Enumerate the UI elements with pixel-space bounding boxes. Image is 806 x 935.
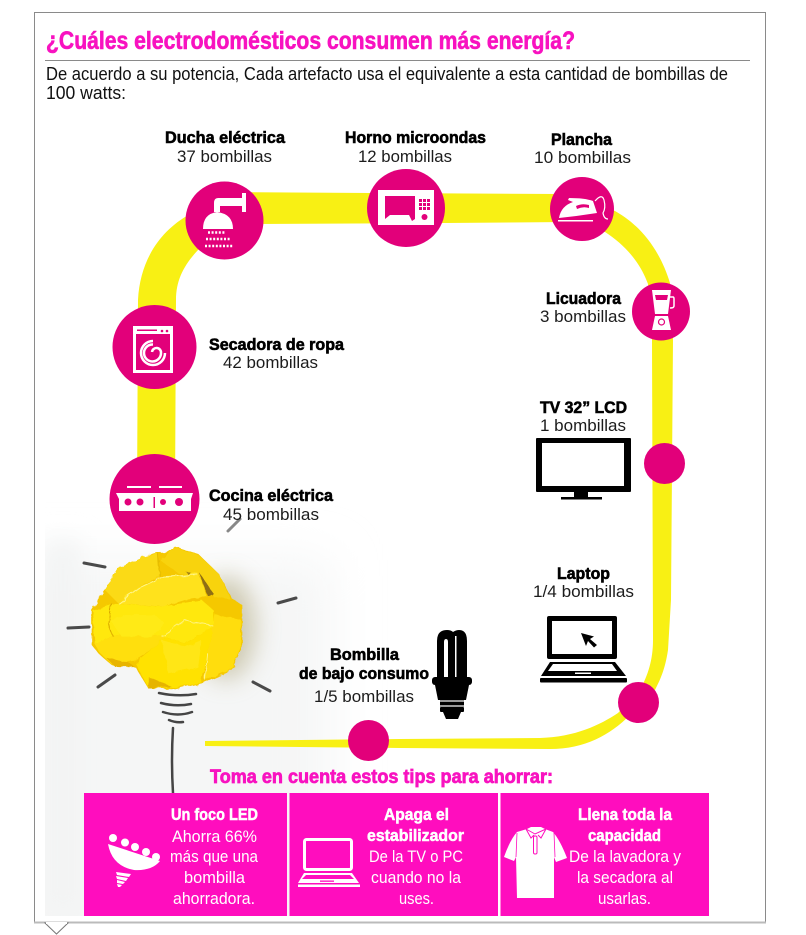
label: de bajo consumo (299, 664, 429, 683)
text: Un foco LED (171, 805, 258, 824)
text: De la lavadora y (569, 847, 681, 866)
paper shadow (196, 576, 256, 680)
label (540, 289, 626, 326)
icon: microwave (378, 190, 434, 225)
tips heading: Toma en cuenta estos tips para ahorrar: (210, 767, 553, 788)
station: horno microondas (345, 128, 486, 247)
label: 12 bombillas (358, 147, 452, 166)
label: 1/4 bombillas (533, 582, 634, 601)
label (209, 335, 345, 372)
icon: stove (116, 486, 193, 511)
label: 3 bombillas (540, 307, 626, 326)
intro text (46, 64, 728, 103)
label (209, 486, 334, 524)
circle (632, 282, 690, 340)
text: bombilla (184, 868, 246, 887)
dot: bottom route (348, 720, 389, 761)
label: Secadora de ropa (209, 335, 345, 354)
text: De la TV o PC (369, 847, 463, 866)
label: Bombilla (330, 645, 400, 664)
label: 45 bombillas (223, 505, 319, 524)
intro text: De acuerdo a su potencia, Cada artefacto usa el equivalente a esta cantidad de bombillas de (46, 64, 728, 84)
circle (112, 305, 196, 389)
text: Ahorra 66% (172, 827, 257, 846)
text: usarlas. (598, 889, 651, 908)
icon: shower (203, 193, 246, 246)
station: tv (536, 398, 685, 500)
text: capacidad (588, 826, 661, 845)
photo background (45, 544, 308, 916)
label (165, 128, 286, 166)
label: Horno microondas (345, 128, 486, 147)
crumpled paper bulb (68, 519, 296, 793)
dot (618, 682, 659, 723)
label: Licuadora (546, 289, 621, 308)
panel background (84, 793, 287, 916)
circle (550, 177, 614, 241)
text: Llena toda la (578, 805, 672, 824)
text: ahorradora. (173, 889, 255, 908)
icon: washer (133, 326, 173, 373)
label: Cocina eléctrica (209, 486, 334, 505)
label (534, 130, 631, 167)
station: licuadora (540, 282, 690, 340)
text: estabilizador (367, 826, 464, 845)
text: cuando no la (371, 868, 461, 887)
tip panel: capacidad (500, 793, 709, 916)
label: 1/5 bombillas (314, 687, 414, 706)
pencil rays (68, 519, 296, 691)
label: Plancha (551, 130, 613, 149)
label: 1 bombillas (540, 416, 626, 435)
text: la secadora al (577, 868, 673, 887)
label: Laptop (557, 564, 610, 583)
dot (644, 443, 685, 484)
label (540, 398, 627, 435)
icon: shirt (504, 827, 567, 898)
icon: cfl bulb (432, 630, 472, 719)
label: 42 bombillas (223, 353, 318, 372)
station: secadora de ropa (112, 305, 345, 389)
label (533, 564, 634, 601)
text (170, 805, 258, 908)
station: cocina eléctrica (110, 454, 334, 544)
text: uses. (399, 889, 434, 908)
paper ball (92, 547, 242, 689)
tip panel: foco LED (84, 793, 287, 916)
label: TV 32” LCD (540, 398, 627, 417)
station: ducha eléctrica (165, 128, 286, 260)
text: más que una (170, 847, 258, 866)
circle (110, 454, 200, 544)
text: Apaga el (384, 805, 449, 824)
text (367, 805, 464, 908)
icon: iron (558, 197, 608, 222)
label (345, 128, 486, 166)
icon: laptop (540, 616, 627, 682)
intro text: 100 watts: (46, 83, 126, 103)
label: 37 bombillas (177, 147, 272, 166)
station: bombilla de bajo consumo (299, 630, 472, 719)
icon: tv (536, 438, 631, 500)
icon: LED bulb (108, 834, 160, 887)
pencil filament and stem (159, 693, 196, 793)
text (569, 805, 681, 908)
yellow route (137, 192, 673, 749)
station: plancha (534, 130, 631, 241)
label: Ducha eléctrica (165, 128, 286, 147)
panel background (500, 793, 709, 916)
panel background (290, 793, 498, 916)
icon: laptop (298, 840, 360, 887)
icon: blender (652, 290, 674, 330)
label (299, 645, 429, 706)
title: ¿Cuáles electrodomésticos consumen más energía? (46, 27, 575, 55)
label: 10 bombillas (534, 148, 631, 167)
circle (186, 182, 264, 260)
circle (367, 169, 445, 247)
station: laptop (533, 564, 659, 723)
tip panel: estabilizador (290, 793, 498, 916)
